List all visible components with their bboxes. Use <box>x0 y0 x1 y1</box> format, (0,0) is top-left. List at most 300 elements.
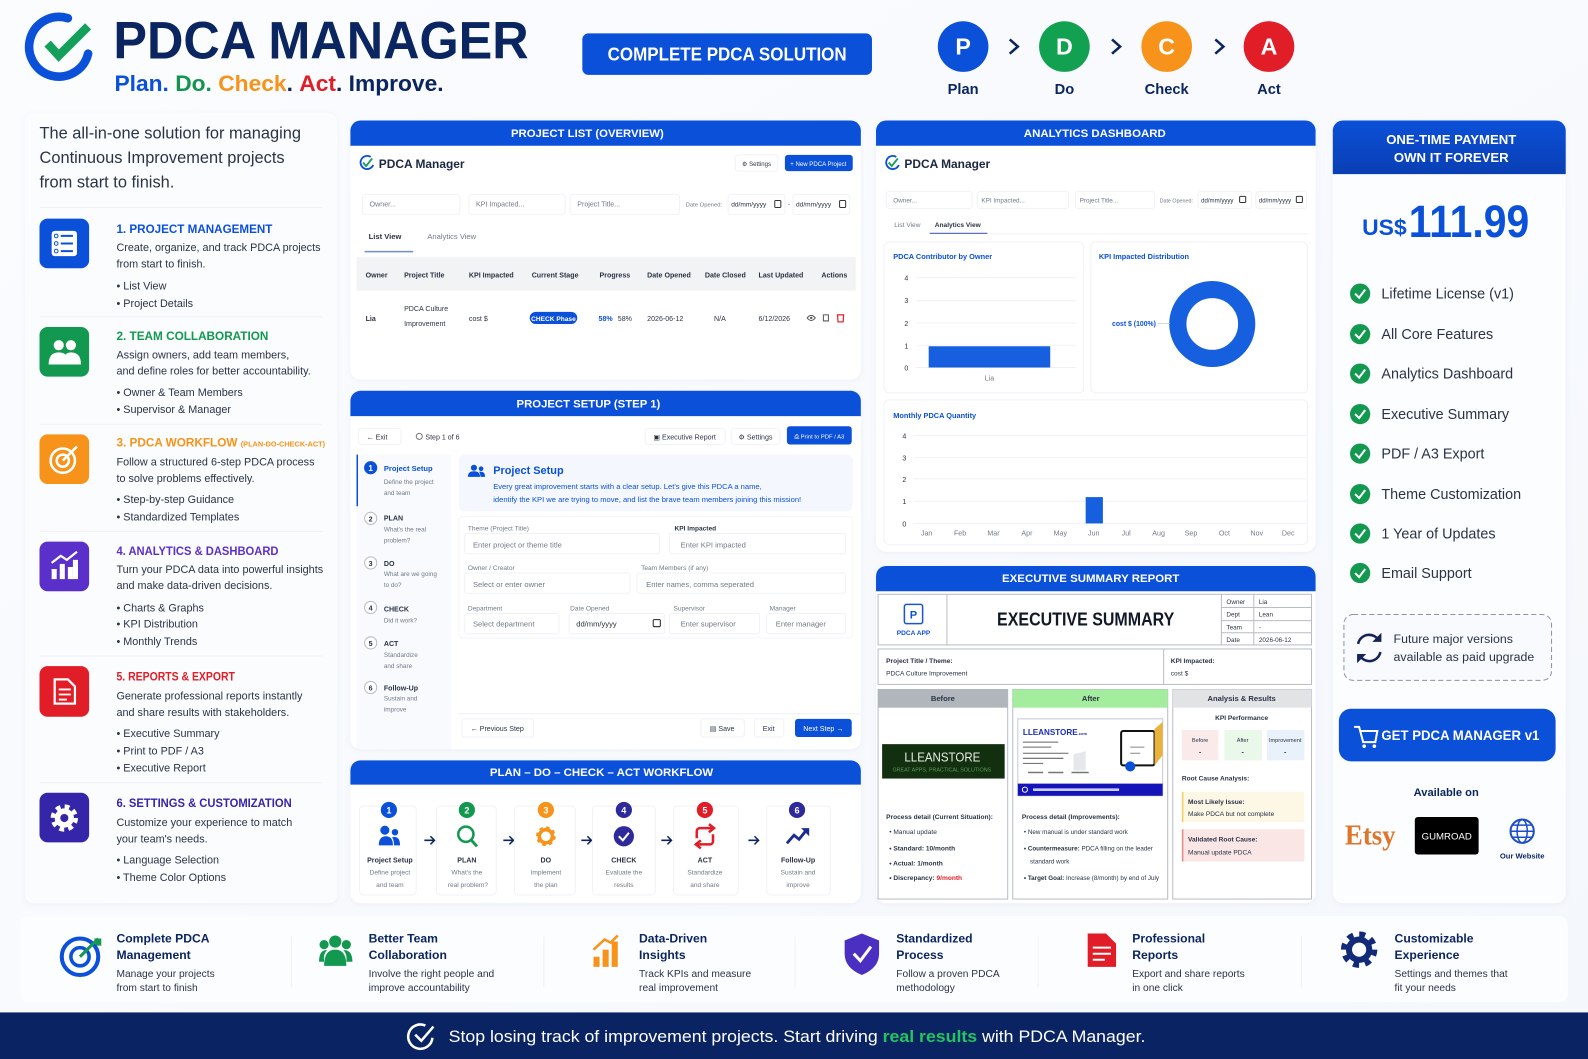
column: after: • Countermeasure: PDCA filling on the leader <box>1024 845 1153 852</box>
filters: dd/mm/yyyy <box>1259 198 1292 204</box>
feature 4 analytics: 4. ANALYTICS & DASHBOARD <box>116 544 279 558</box>
feature 2 team collaboration: • Supervisor & Manager <box>116 404 231 416</box>
table: CHECK Phase <box>531 316 576 323</box>
tagline: Stop losing track of improvement projects. Start driving real results with PDCA Manager. <box>449 1027 1145 1046</box>
benefit: team collaboration: improve accountability <box>369 983 471 994</box>
panel: pricing <box>1333 120 1566 903</box>
project title row: Project Title / Theme: <box>886 658 953 665</box>
step 4 card: results <box>614 882 634 889</box>
chart: monthly PDCA quantity: 4 <box>902 432 906 440</box>
chart: monthly PDCA quantity: 1 <box>902 498 906 506</box>
step 2 card: real problem? <box>448 882 488 889</box>
filters: Owner... <box>370 201 396 209</box>
column: analysis and results: Root Cause Analysis: <box>1182 776 1249 783</box>
feature 1 project management <box>39 219 321 310</box>
chart: KPI impacted distribution <box>1091 242 1307 393</box>
setup form: Date Opened <box>570 605 610 612</box>
setup form: KPI Impacted <box>674 526 716 533</box>
toolbar: Step 1 of 6 <box>425 433 460 441</box>
step 4 card <box>592 802 655 895</box>
tabs: List View <box>894 222 921 229</box>
setup form: Enter KPI impacted <box>681 541 746 550</box>
step sidebar: ACT <box>384 640 399 648</box>
benefit: professional reports: Reports <box>1132 948 1178 962</box>
column: after: • New manual is under standard work <box>1024 829 1129 836</box>
title: PDCA MANAGER <box>113 12 529 71</box>
filters: KPI Impacted... <box>981 197 1025 204</box>
feature 2 team collaboration <box>39 327 311 416</box>
step 3 card: Implement <box>531 870 561 877</box>
header <box>29 12 1294 98</box>
step sidebar: problem? <box>384 538 411 545</box>
feature 6 settings: • Theme Color Options <box>116 872 227 884</box>
feature 4 analytics: • KPI Distribution <box>116 619 198 631</box>
setup form <box>459 516 853 638</box>
step 6 card <box>767 802 830 895</box>
benefit: complete PDCA management <box>62 932 215 994</box>
step 1 card: and team <box>376 882 404 889</box>
benefit: standardized process: methodology <box>896 983 956 994</box>
benefit: data-driven insights <box>593 932 751 994</box>
step sidebar: What are we going <box>384 571 437 578</box>
panel: features list <box>25 113 337 903</box>
column: analysis and results: Analysis & Results <box>1208 694 1276 703</box>
panel: analytics dashboard <box>876 120 1316 552</box>
step 1 card <box>360 802 416 895</box>
panel header: EXECUTIVE SUMMARY REPORT <box>1002 573 1179 585</box>
column: before: Before <box>931 694 955 703</box>
benefit: complete PDCA management: Management <box>116 948 191 962</box>
chart: monthly PDCA quantity: Mar <box>987 530 1000 538</box>
toolbar: ⚙ Settings <box>739 433 773 441</box>
PDCA cycle: Plan <box>948 82 979 98</box>
chart: monthly PDCA quantity: 0 <box>902 520 906 528</box>
setup form: Theme (Project Title) <box>468 526 529 533</box>
column: analysis and results <box>1173 689 1312 899</box>
project title row: PDCA Culture Improvement <box>886 670 968 677</box>
intro text: The all-in-one solution for managing <box>39 125 301 143</box>
price: 111.99 <box>1409 196 1529 247</box>
benefit: standardized process: Follow a proven PDCA <box>896 969 1000 980</box>
panel: project list <box>350 120 861 380</box>
chart: monthly PDCA quantity: Dec <box>1282 530 1295 538</box>
icon: check <box>408 1025 433 1049</box>
step sidebar: Project Setup <box>384 464 433 473</box>
chart: PDCA contributor by owner: PDCA Contributor by Owner <box>893 252 992 261</box>
report header: - <box>1259 625 1261 632</box>
setup callout: Every great improvement starts with a clear setup. Let's give this PDCA a name, <box>493 482 762 491</box>
setup callout: identify the KPI we are trying to move, and list the brave team members joining this mission! <box>493 495 801 504</box>
tabs <box>365 232 477 252</box>
table: 2026-06-12 <box>647 315 683 323</box>
filters <box>886 191 1306 209</box>
filters: Owner... <box>893 197 917 204</box>
column: before: • Standard: 10/month <box>889 845 955 852</box>
tagline: Plan. Do. Check. Act. Improve. <box>114 71 444 96</box>
setup footer buttons: Exit <box>763 725 775 733</box>
PDCA cycle: Do <box>1055 82 1074 98</box>
pricing header: ONE-TIME PAYMENT <box>1386 132 1516 147</box>
checklist: Email Support <box>1381 566 1472 582</box>
PDCA cycle: Act <box>1257 82 1281 98</box>
panel header <box>876 566 1316 591</box>
setup form: Manager <box>770 605 796 612</box>
step 6 card: Sustain and <box>781 870 816 877</box>
step 2 card: 2 <box>464 805 469 815</box>
step 5 card: 5 <box>702 805 707 815</box>
app bar <box>361 155 853 171</box>
setup form: Select or enter owner <box>473 580 545 589</box>
step sidebar: DO <box>384 560 395 568</box>
checklist <box>1350 283 1521 583</box>
chart: PDCA contributor by owner: 4 <box>904 274 908 282</box>
report header: EXECUTIVE SUMMARY <box>997 610 1174 630</box>
panel: workflow <box>350 760 861 903</box>
available on: GUMROAD <box>1422 831 1472 842</box>
tabs <box>894 222 1307 234</box>
column: before: • Manual update <box>889 829 937 836</box>
panel header <box>876 120 1316 146</box>
step sidebar: 6 <box>369 684 373 692</box>
step 3 card <box>514 802 575 895</box>
feature 4 analytics: • Monthly Trends <box>116 636 198 648</box>
toolbar: ⎙ Print to PDF / A3 <box>794 433 844 440</box>
column: analysis and results: Make PDCA but not complete <box>1188 811 1275 818</box>
column: after: After <box>1082 694 1100 703</box>
column: analysis and results: KPI Performance <box>1215 715 1268 722</box>
project title row <box>878 649 1312 684</box>
filters: Date Opened: <box>686 203 722 209</box>
benefit: standardized process: Standardized <box>896 932 973 946</box>
report header: P <box>910 610 918 622</box>
upgrade note: Future major versions <box>1394 632 1513 646</box>
column: after <box>1013 689 1168 899</box>
feature 1 project management: 1. PROJECT MANAGEMENT <box>116 222 273 236</box>
table: N/A <box>714 315 726 323</box>
report header: Dept <box>1226 612 1240 619</box>
benefit: professional reports: in one click <box>1132 983 1184 994</box>
table: Actions <box>821 271 847 279</box>
benefits strip <box>20 916 1568 1002</box>
step sidebar: Define the project <box>384 479 434 486</box>
setup footer buttons <box>462 719 852 737</box>
report header: Lean <box>1259 612 1273 619</box>
column: before <box>878 689 1008 899</box>
feature 5 reports <box>39 666 303 774</box>
step 5 card: and share <box>690 882 720 889</box>
benefit: customizable experience: Experience <box>1395 948 1460 962</box>
buy button: GET PDCA MANAGER v1 <box>1381 728 1540 743</box>
step 6 card: Follow-Up <box>781 857 816 865</box>
table: Lia <box>366 315 376 323</box>
step 6 card: improve <box>786 882 810 889</box>
feature 3 workflow: Follow a structured 6-step PDCA process <box>116 457 315 469</box>
table: Current Stage <box>532 271 579 279</box>
chart: PDCA contributor by owner: 1 <box>904 342 908 350</box>
tabs: Analytics View <box>427 232 477 241</box>
step sidebar: 5 <box>369 640 373 648</box>
PDCA cycle: P <box>955 34 971 60</box>
chart: KPI impacted distribution: cost $ (100%) <box>1112 321 1156 328</box>
step sidebar: Follow-Up <box>384 684 419 692</box>
upgrade note <box>1344 615 1552 680</box>
table: 6/12/2026 <box>759 315 790 323</box>
checklist: All Core Features <box>1381 327 1493 343</box>
setup callout <box>459 455 853 511</box>
setup form: Department <box>468 605 502 612</box>
available on: Etsy <box>1345 820 1396 851</box>
panel header: PLAN – DO – CHECK – ACT WORKFLOW <box>490 767 713 779</box>
chart: PDCA contributor by owner: 3 <box>904 297 908 305</box>
chart: monthly PDCA quantity: 3 <box>902 455 906 463</box>
feature 2 team collaboration: • Owner & Team Members <box>116 387 243 399</box>
setup form: Supervisor <box>673 605 706 612</box>
setup footer buttons: ▤ Save <box>710 725 735 733</box>
chart: monthly PDCA quantity: Aug <box>1152 530 1165 538</box>
filters: - <box>788 201 791 209</box>
app bar: ⚙ Settings <box>742 161 771 168</box>
badge: COMPLETE PDCA SOLUTION <box>608 45 847 65</box>
feature 5 reports: Generate professional reports instantly <box>116 691 303 703</box>
step sidebar: CHECK <box>384 606 410 614</box>
step 4 card: Evaluate the <box>606 870 642 877</box>
setup footer buttons: ← Previous Step <box>471 725 524 733</box>
column: analysis and results: After <box>1237 738 1249 744</box>
pricing header: OWN IT FOREVER <box>1394 150 1509 165</box>
column: before: GREAT APPS, PRACTICAL SOLUTIONS <box>892 767 992 773</box>
tabs: Analytics View <box>935 222 982 229</box>
step 1 card: Define project <box>370 870 410 877</box>
available on: Available on <box>1414 787 1479 799</box>
table: 58% <box>618 315 633 323</box>
feature 4 analytics: and make data-driven decisions. <box>116 580 272 592</box>
feature 3 workflow: • Standardized Templates <box>116 511 240 523</box>
benefit: customizable experience: Customizable <box>1395 932 1474 946</box>
setup form: Enter project or theme title <box>473 541 562 550</box>
setup callout: Project Setup <box>493 465 564 477</box>
feature 5 reports: • Print to PDF / A3 <box>116 745 204 757</box>
intro text: from start to finish. <box>39 173 174 191</box>
PDCA cycle: Check <box>1145 82 1190 98</box>
app bar: + New PDCA Project <box>790 162 847 168</box>
logo <box>29 17 88 77</box>
chart: monthly PDCA quantity: Feb <box>954 530 966 538</box>
step sidebar: PLAN <box>384 514 403 522</box>
setup form: Enter manager <box>776 620 826 629</box>
column: analysis and results: - <box>1199 748 1202 756</box>
benefit: customizable experience <box>1344 932 1508 994</box>
step sidebar: Sustain and <box>384 696 418 703</box>
benefit: team collaboration <box>319 932 495 994</box>
step 1 card: 1 <box>386 805 391 815</box>
chart: monthly PDCA quantity: Apr <box>1021 530 1033 538</box>
benefit: data-driven insights: Insights <box>639 948 686 962</box>
feature 6 settings <box>39 793 292 884</box>
feature 6 settings: • Language Selection <box>116 855 219 867</box>
checklist: Analytics Dashboard <box>1381 367 1513 383</box>
chart: monthly PDCA quantity <box>884 400 1307 545</box>
feature 2 team collaboration: 2. TEAM COLLABORATION <box>116 329 268 343</box>
feature 5 reports: and share results with stakeholders. <box>116 707 289 719</box>
panel header: ANALYTICS DASHBOARD <box>1024 128 1166 140</box>
table: Improvement <box>404 320 445 328</box>
app bar: PDCA Manager <box>904 157 991 171</box>
benefit: team collaboration: Involve the right people and <box>369 969 495 980</box>
chart: PDCA contributor by owner <box>884 242 1084 393</box>
filters: dd/mm/yyyy <box>1201 198 1234 204</box>
benefit: data-driven insights: real improvement <box>639 983 718 994</box>
step sidebar: 3 <box>369 560 373 568</box>
column: analysis and results: Manual update PDCA <box>1188 849 1252 856</box>
price: US$ <box>1362 215 1407 240</box>
setup form: Enter supervisor <box>681 620 736 629</box>
chart: monthly PDCA quantity: 2 <box>902 476 906 484</box>
filters: Project Title... <box>577 201 620 209</box>
table: cost $ <box>469 315 488 323</box>
table: Date Opened <box>647 271 691 279</box>
checklist: PDF / A3 Export <box>1381 447 1484 463</box>
feature 1 project management: • Project Details <box>116 298 194 310</box>
step sidebar: What's the real <box>384 527 426 534</box>
filters: Date Opened: <box>1160 198 1193 204</box>
arrow <box>661 836 671 844</box>
chart: monthly PDCA quantity: Jan <box>921 530 932 538</box>
chart: PDCA contributor by owner: Lia <box>985 375 994 383</box>
toolbar <box>359 426 852 444</box>
project title row: cost $ <box>1171 670 1189 677</box>
step 3 card: DO <box>541 857 552 865</box>
column: analysis and results: - <box>1284 748 1287 756</box>
footer banner <box>0 1012 1588 1059</box>
panel header: PROJECT LIST (OVERVIEW) <box>511 128 664 140</box>
benefit: team collaboration: Better Team <box>369 932 438 946</box>
table: Date Closed <box>705 271 746 279</box>
setup form: Owner / Creator <box>468 565 516 572</box>
report header: Lia <box>1259 599 1268 606</box>
table: Progress <box>600 271 630 279</box>
feature 1 project management: • List View <box>116 281 167 293</box>
table: 58% <box>599 315 613 323</box>
report header: PDCA APP <box>897 630 931 637</box>
table: Last Updated <box>759 271 803 279</box>
feature 6 settings: 6. SETTINGS & CUSTOMIZATION <box>116 796 292 810</box>
panel header <box>350 760 861 785</box>
column: before: • Actual: 1/month <box>889 861 943 868</box>
step sidebar: to do? <box>384 582 402 589</box>
chart: monthly PDCA quantity: Oct <box>1219 530 1230 538</box>
price <box>1362 196 1529 247</box>
feature 1 project management: from start to finish. <box>116 258 206 270</box>
PDCA cycle: C <box>1158 34 1175 60</box>
panel header <box>350 120 861 146</box>
feature 6 settings: Customize your experience to match <box>116 817 292 829</box>
benefit: team collaboration: Collaboration <box>369 948 447 962</box>
step 5 card: ACT <box>698 857 713 865</box>
benefit: data-driven insights: Track KPIs and measure <box>639 969 751 980</box>
chart: monthly PDCA quantity: May <box>1054 530 1068 538</box>
setup form: Team Members (if any) <box>641 565 708 572</box>
benefit: complete PDCA management: Complete PDCA <box>116 932 210 946</box>
report header: Team <box>1226 625 1242 632</box>
step sidebar: and team <box>384 490 410 497</box>
report header: Owner <box>1226 599 1246 606</box>
column: before: 9/month <box>936 875 962 882</box>
benefit: professional reports <box>1088 932 1245 994</box>
feature 4 analytics: Turn your PDCA data into powerful insights <box>116 564 324 576</box>
filters: KPI Impacted... <box>476 201 524 209</box>
checklist: Theme Customization <box>1381 487 1521 503</box>
chart: monthly PDCA quantity: Jul <box>1122 530 1131 538</box>
feature 3 workflow: 3. PDCA WORKFLOW (PLAN-DO-CHECK-ACT) <box>116 435 326 449</box>
tabs: List View <box>369 232 401 241</box>
project title row: KPI Impacted: <box>1171 658 1215 665</box>
chart: monthly PDCA quantity: Nov <box>1251 530 1264 538</box>
setup form: dd/mm/yyyy <box>576 620 617 629</box>
feature 2 team collaboration: Assign owners, add team members, <box>116 349 289 361</box>
feature 4 analytics <box>39 542 324 648</box>
benefit: standardized process <box>845 932 1000 994</box>
filters: dd/mm/yyyy <box>796 202 832 209</box>
step 2 card: What's the <box>451 870 483 877</box>
chart: monthly PDCA quantity: Sep <box>1185 530 1197 538</box>
column: before: Process detail (Current Situation): <box>886 814 993 821</box>
buy button <box>1339 709 1556 761</box>
column: analysis and results: Before <box>1192 738 1208 744</box>
step sidebar: 2 <box>369 515 373 523</box>
arrow <box>424 836 434 844</box>
column: after: • Target Goal: Increase (8/month) by end of July <box>1024 875 1159 882</box>
column: before: LLEANSTORE <box>904 749 981 764</box>
step sidebar: and share <box>384 663 413 670</box>
feature 5 reports: • Executive Summary <box>116 728 220 740</box>
feature 5 reports: • Executive Report <box>116 762 206 774</box>
benefit: customizable experience: Settings and themes that <box>1395 969 1508 980</box>
step 6 card: 6 <box>794 805 800 815</box>
benefit: customizable experience: fit your needs <box>1395 983 1456 994</box>
available on: Our Website <box>1500 852 1544 861</box>
benefit: professional reports: Professional <box>1132 932 1205 946</box>
table: Project Title <box>404 271 445 279</box>
step sidebar: 4 <box>369 604 373 612</box>
step 4 card: 4 <box>621 805 627 815</box>
upgrade note: available as paid upgrade <box>1394 650 1534 664</box>
intro text: Continuous Improvement projects <box>39 149 285 167</box>
panel: executive summary <box>876 566 1316 903</box>
step sidebar <box>356 455 452 749</box>
step 2 card <box>436 802 496 895</box>
feature 4 analytics: • Charts & Graphs <box>116 603 205 615</box>
feature 5 reports: 5. REPORTS & EXPORT <box>116 669 235 683</box>
step 4 card: CHECK <box>611 857 637 865</box>
panel header: PROJECT SETUP (STEP 1) <box>517 399 661 411</box>
checklist: Executive Summary <box>1381 407 1510 423</box>
step sidebar: improve <box>384 707 407 714</box>
report header: Date <box>1226 637 1240 644</box>
benefit: data-driven insights: Data-Driven <box>639 932 707 946</box>
table: PDCA Culture <box>404 305 448 313</box>
column: analysis and results: Validated Root Cause: <box>1188 836 1257 843</box>
column: after: Process detail (Improvements): <box>1022 814 1120 821</box>
report header <box>878 594 1312 645</box>
after screenshot <box>1018 719 1163 796</box>
chart: PDCA contributor by owner: 2 <box>904 320 908 328</box>
step 3 card: 3 <box>543 805 548 815</box>
feature 2 team collaboration: and define roles for better accountability. <box>116 366 311 378</box>
filters <box>363 194 850 215</box>
column: after: standard work <box>1030 859 1070 866</box>
available on <box>1345 787 1544 861</box>
chart: monthly PDCA quantity: Monthly PDCA Quantity <box>893 411 977 420</box>
